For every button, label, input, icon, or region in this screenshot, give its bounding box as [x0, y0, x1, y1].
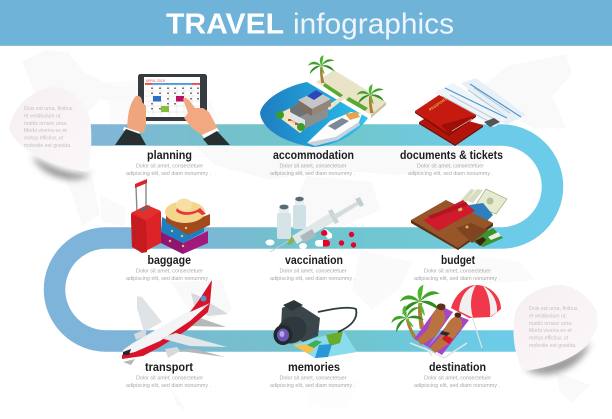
- label: vaccination: [270, 255, 355, 282]
- label: planning: Dolor sit amet, consectetuer: [136, 164, 203, 170]
- straw hat: [165, 201, 205, 223]
- label: documents and tickets: adipiscing elit, sed diam nonummy .: [408, 171, 493, 177]
- icon: tablet calendar with hands: APRIL 2018: [146, 79, 165, 83]
- yacht: [307, 112, 362, 143]
- icon: passports and tickets: [415, 78, 526, 146]
- label: planning: planning: [147, 150, 192, 162]
- map: [293, 330, 357, 358]
- passport back: [419, 112, 483, 144]
- label: vaccination: adipiscing elit, sed diam nonummy .: [270, 276, 355, 282]
- syringe: [270, 197, 364, 252]
- pills: [266, 229, 356, 249]
- label: baggage: Dolor sit amet, consectetuer: [136, 268, 203, 274]
- right hand: [183, 98, 218, 136]
- label: documents and tickets: documents & tickets: [400, 150, 503, 162]
- ticket front: [434, 83, 509, 127]
- label: baggage: adipiscing elit, sed diam nonummy .: [126, 276, 211, 282]
- island villa: [276, 96, 334, 133]
- title: TRAVEL: [166, 8, 284, 40]
- palm trees: [308, 55, 384, 113]
- umbrella: [472, 316, 482, 348]
- tail stabiliser: [191, 293, 228, 316]
- sunbathers: [417, 308, 445, 345]
- icon: wallet with cards and cash: [411, 189, 507, 250]
- label: accommodation: [270, 150, 355, 177]
- label: baggage: [126, 255, 211, 282]
- note text: et vestibulum ut,: [24, 114, 62, 120]
- label: memories: memories: [288, 362, 340, 374]
- passport front: [415, 95, 476, 134]
- fuselage: [122, 306, 206, 356]
- icon: passports and tickets: PASSPORT: [428, 97, 448, 112]
- label: destination: adipiscing elit, sed diam nonummy .: [414, 383, 500, 389]
- left hand: [127, 96, 146, 133]
- icon: vaccine vials and syringe: [266, 197, 364, 252]
- wallet clasp: [456, 223, 488, 243]
- label: planning: [126, 150, 211, 177]
- label: budget: adipiscing elit, sed diam nonummy .: [414, 276, 500, 282]
- label: destination: [414, 362, 500, 389]
- note text: Morbi viverra ex et: [24, 128, 67, 134]
- route: serpentine path: [54, 135, 552, 341]
- left sunbed: [414, 305, 453, 347]
- note text: et vestibulum ut,: [529, 314, 567, 320]
- icon: beach chairs, palms and umbrella: [387, 285, 501, 358]
- vial right: [293, 197, 306, 229]
- label: planning: adipiscing elit, sed diam nonummy .: [126, 171, 211, 177]
- label: destination: destination: [429, 362, 486, 374]
- purple case: [161, 231, 208, 254]
- vial left: [277, 205, 291, 239]
- upper wing: [137, 296, 162, 332]
- lens: [273, 311, 311, 349]
- note text: mattis ornare urna.: [529, 321, 573, 327]
- right sunbed: [428, 315, 469, 355]
- icon: beach villa and yacht: [260, 55, 386, 147]
- icon: tablet calendar with hands: [115, 74, 230, 145]
- camera body: [281, 302, 320, 342]
- label: baggage: baggage: [148, 255, 191, 267]
- note: right callout: [513, 285, 598, 374]
- label: vaccination: vaccination: [285, 255, 343, 267]
- sand pier: [316, 70, 386, 115]
- label: vaccination: Dolor sit amet, consectetuer: [280, 268, 347, 274]
- note: left callout: [9, 87, 92, 179]
- ground shadows: [178, 318, 226, 327]
- icon: luggage with hat: [131, 179, 210, 254]
- banknotes: [461, 189, 483, 203]
- brown case: [166, 212, 210, 235]
- label: documents and tickets: [400, 150, 503, 177]
- label: memories: [270, 362, 355, 389]
- label: transport: adipiscing elit, sed diam nonummy .: [126, 383, 211, 389]
- label: accommodation: adipiscing elit, sed diam nonummy .: [270, 171, 355, 177]
- note text: metus efficitur, ut: [24, 136, 64, 142]
- note text: metus efficitur, ut: [529, 336, 569, 342]
- engines: [134, 329, 146, 340]
- palms: [387, 285, 440, 343]
- tail fin: [190, 280, 212, 312]
- label: accommodation: Dolor sit amet, consectetuer: [280, 164, 347, 170]
- blue card: [469, 203, 493, 222]
- label: transport: Dolor sit amet, consectetuer: [136, 376, 203, 382]
- note text: molestie est gravida.: [24, 143, 72, 149]
- icon: camera with strap and map: [273, 300, 357, 358]
- header banner: [0, 0, 612, 46]
- strap: [318, 308, 356, 332]
- label: budget: Dolor sit amet, consectetuer: [424, 268, 491, 274]
- note text: Duis est urna, finibus: [24, 106, 73, 112]
- note text: mattis ornare urna.: [24, 121, 68, 127]
- green card: [469, 228, 503, 247]
- title light part: infographics: [293, 8, 454, 40]
- label: transport: [126, 362, 211, 389]
- blue case: [161, 217, 204, 243]
- trolley handle: [136, 182, 146, 213]
- label: accommodation: accommodation: [273, 150, 354, 162]
- wallet body: [411, 220, 493, 250]
- red card: [423, 200, 475, 231]
- icon: airplane: [122, 280, 228, 365]
- label: transport: transport: [145, 362, 193, 374]
- label: destination: Dolor sit amet, consectetuer: [424, 376, 491, 382]
- label: memories: adipiscing elit, sed diam nonummy .: [270, 383, 355, 389]
- note text: molestie est gravida.: [529, 343, 577, 349]
- note text: Duis est urna, finibus: [529, 306, 578, 312]
- lower wing: [160, 333, 227, 347]
- label: budget: budget: [441, 255, 475, 267]
- note text: Morbi viverra ex et: [529, 328, 572, 334]
- label: memories: Dolor sit amet, consectetuer: [280, 376, 347, 382]
- label: documents and tickets: Dolor sit amet, consectetuer: [417, 164, 484, 170]
- label: budget: [414, 255, 500, 282]
- red suitcase: [131, 205, 161, 253]
- ticket back: [461, 78, 526, 125]
